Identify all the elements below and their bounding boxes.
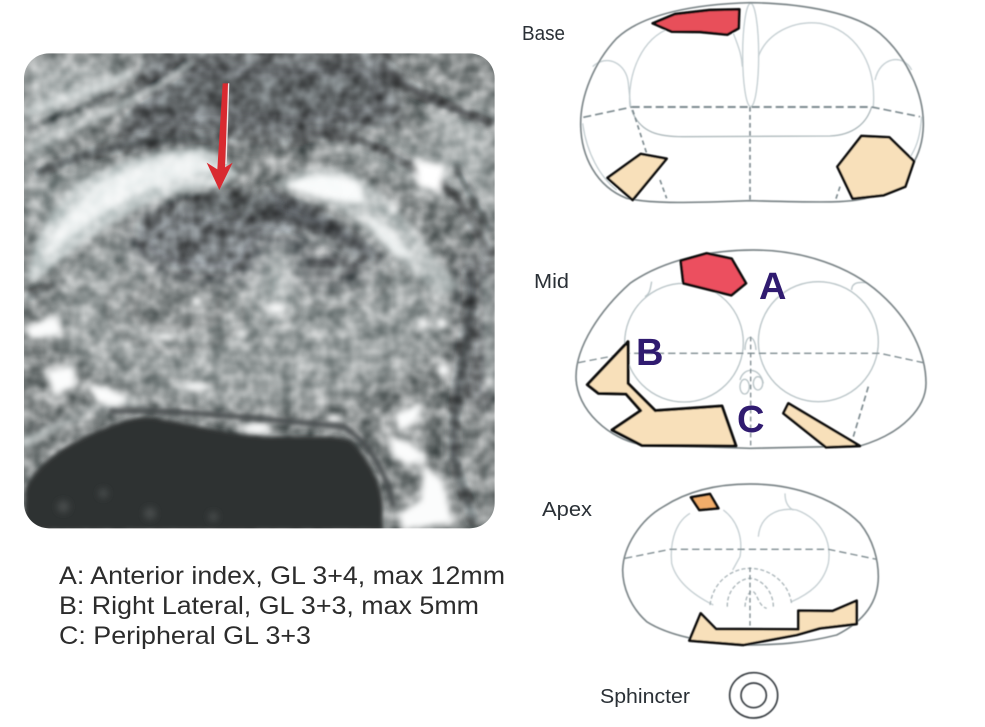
marker: C: C — [737, 399, 764, 441]
base dashed section lines — [583, 107, 920, 202]
mid outline — [576, 250, 926, 448]
label: Mid: Mid — [534, 271, 569, 293]
base inner anatomy lines — [583, 3, 922, 190]
label: Sphincter: Sphincter — [600, 686, 690, 708]
arrow: red pointer — [207, 83, 233, 190]
lesion C: mid peripheral peach — [783, 403, 860, 447]
apex inner anatomy lines — [671, 493, 829, 605]
mid inner anatomy lines — [625, 282, 878, 402]
panel: MRI scan — [23, 53, 495, 530]
caption: tumour legend: B: Right Lateral, GL 3+3, max 5mm — [59, 592, 479, 620]
lesion B: mid right lateral peach — [587, 342, 736, 446]
caption: tumour legend: C: Peripheral GL 3+3 — [59, 622, 311, 650]
diagram: mid section — [576, 250, 926, 448]
dark arc above rectum — [110, 411, 393, 507]
caption: tumour legend: A: Anterior index, GL 3+4, max 12mm — [59, 562, 505, 590]
bright patches — [24, 202, 453, 530]
mid dashed section lines — [578, 337, 923, 447]
diagram: apex section — [623, 484, 878, 718]
apex outline — [623, 484, 878, 645]
marker: B: B — [636, 332, 663, 374]
bright periprostatic bands — [27, 147, 460, 297]
mottling texture — [24, 53, 495, 528]
lesion: base left peach — [607, 154, 667, 200]
label: Apex: Apex — [542, 499, 592, 521]
lesion A: mid anterior red — [681, 253, 746, 295]
marker: A: A — [759, 266, 786, 308]
diagram: base section — [581, 3, 923, 202]
icon: sphincter rings — [730, 673, 778, 718]
lesion: base right peach — [837, 136, 914, 199]
apex urethra arcs — [710, 568, 792, 608]
lesion: base anterior red — [653, 9, 739, 35]
lesion: apex anterior orange — [691, 494, 718, 510]
lesion: apex posterior peach — [689, 601, 857, 645]
apex dashed section lines — [625, 549, 877, 630]
label: Base: Base — [522, 23, 565, 45]
caption: tumour legend — [59, 562, 505, 650]
rectum (dark lumen) — [23, 417, 383, 530]
base outline — [581, 3, 923, 202]
prostate gland — [47, 198, 453, 410]
surrounding tissue — [24, 53, 495, 528]
